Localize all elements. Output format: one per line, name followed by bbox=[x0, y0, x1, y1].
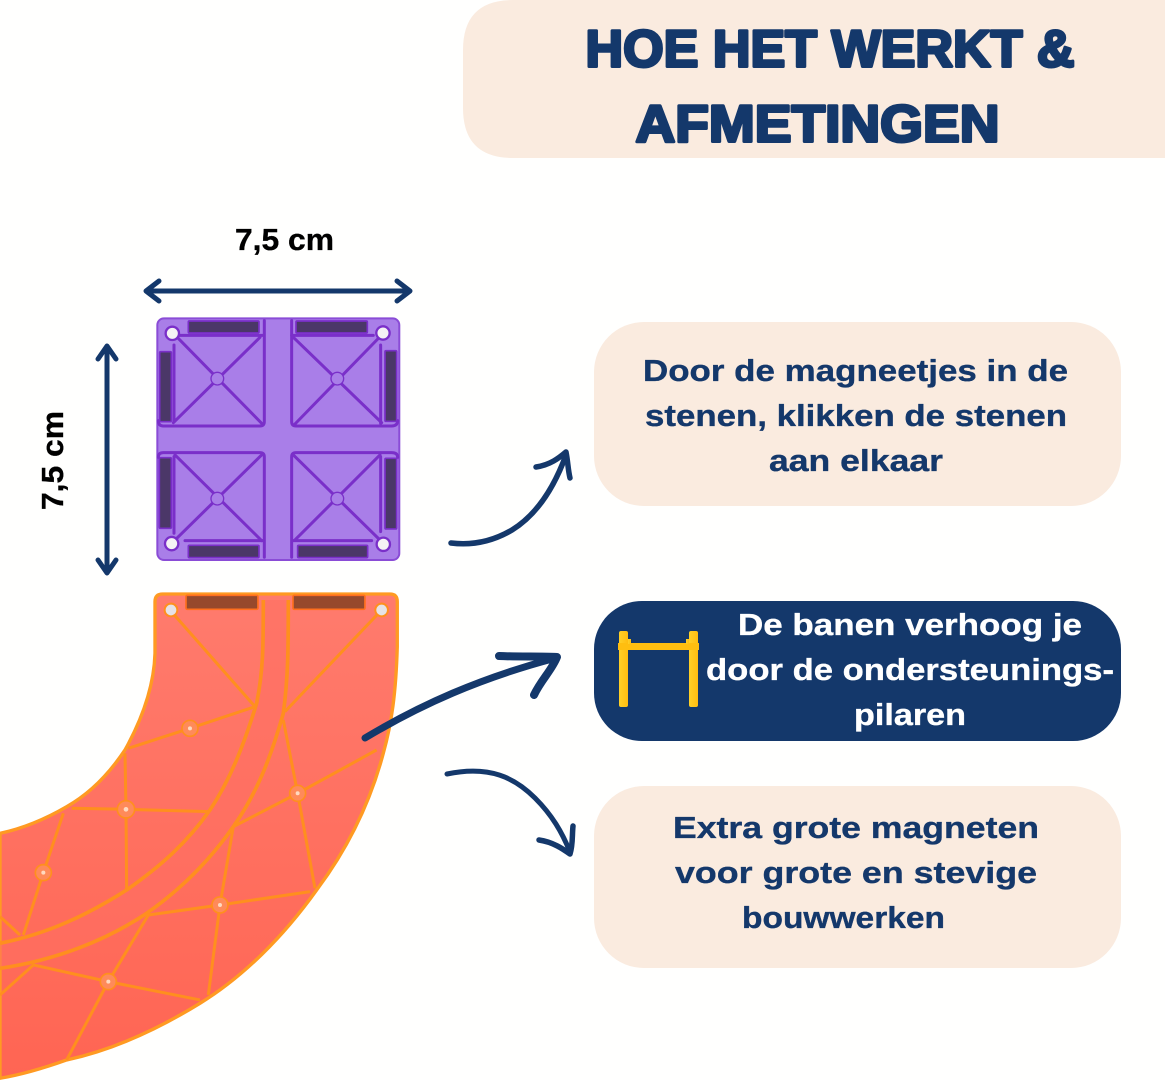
text line: voor grote en stevige bbox=[675, 856, 1037, 890]
info panel: support pillars bbox=[594, 601, 1121, 741]
text line: pilaren bbox=[854, 698, 966, 732]
icon: yellow support pillar bbox=[618, 631, 699, 707]
text line: Door de magneetjes in de bbox=[643, 354, 1068, 388]
text line: door de ondersteunings- bbox=[706, 653, 1114, 687]
arrow to pillar text bbox=[365, 656, 557, 738]
track ribs bbox=[0, 610, 382, 1060]
quadrant centre studs bbox=[211, 372, 344, 505]
text line: Extra grote magneten bbox=[673, 811, 1039, 845]
height arrow bbox=[98, 346, 116, 573]
info panel: large magnets bbox=[594, 786, 1121, 968]
orange curved track tile bbox=[0, 594, 397, 1078]
width dimension label: 7,5 cm bbox=[235, 223, 334, 257]
title line 2: AFMETINGEN bbox=[636, 96, 1000, 154]
title panel bbox=[463, 0, 1165, 158]
text line: bouwwerken bbox=[742, 901, 945, 935]
info panel: magnets click bbox=[594, 322, 1121, 506]
text line: stenen, klikken de stenen bbox=[645, 399, 1067, 433]
purple magnetic square tile bbox=[157, 318, 399, 560]
width arrow bbox=[146, 281, 410, 301]
arrow to magnet text bbox=[451, 452, 570, 544]
text line: De banen verhoog je bbox=[738, 608, 1082, 642]
track node centres bbox=[41, 726, 300, 984]
arrow to large magnets text bbox=[447, 771, 573, 854]
track magnets bbox=[186, 595, 365, 609]
tile corner holes bbox=[165, 326, 390, 551]
track holes bbox=[165, 604, 388, 616]
track channel band bbox=[0, 600, 288, 968]
track nodes bbox=[35, 720, 306, 990]
height dimension label: 7,5 cm bbox=[36, 411, 70, 510]
title line 1: HOE HET WERKT & bbox=[586, 20, 1074, 78]
text line: aan elkaar bbox=[769, 444, 943, 478]
quadrant frames and diagonals bbox=[158, 321, 398, 557]
tile magnets bbox=[159, 321, 397, 558]
track channels bbox=[0, 600, 288, 968]
